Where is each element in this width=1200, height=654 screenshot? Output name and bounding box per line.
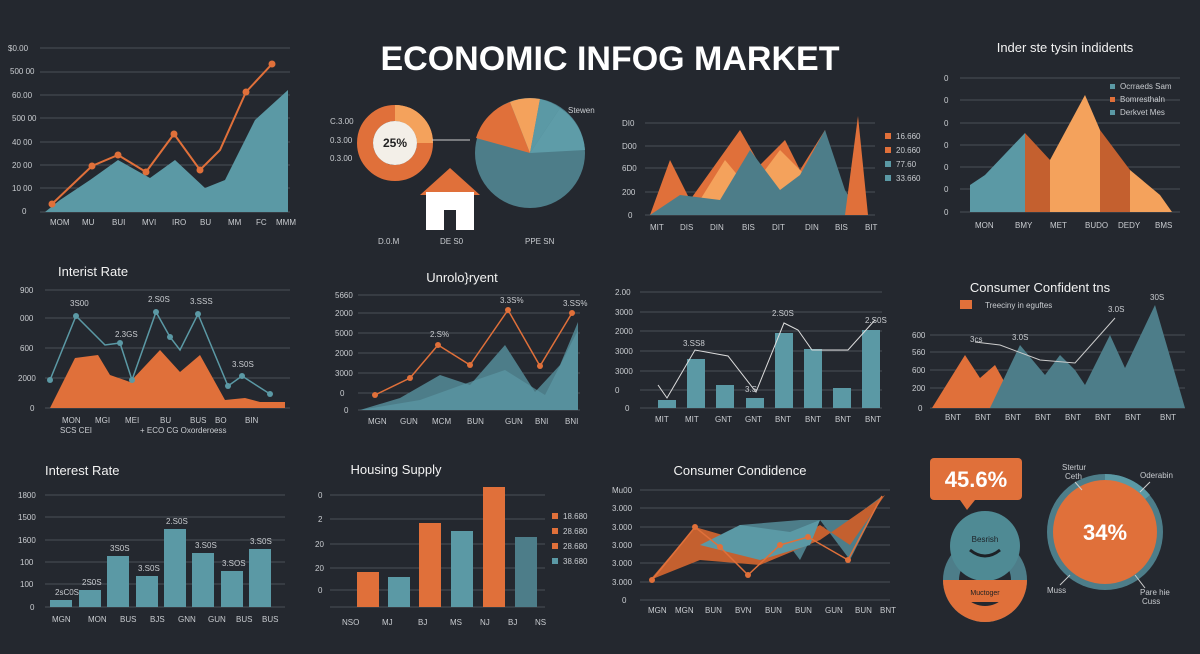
- panel: top right chart: BMS: [1155, 221, 1172, 230]
- panel: bar and line chart: GNT: [745, 415, 762, 424]
- panel: consumer confidence area chart: BNT: [975, 413, 991, 422]
- panel: interist rate line chart: 3.S0S: [232, 360, 254, 369]
- panel: top-left area line chart: MU: [82, 218, 95, 227]
- panel: housing supply bar chart: MJ: [382, 618, 393, 627]
- donut: 34%: Ceth: [1065, 472, 1082, 481]
- panel: interest rate bar chart: 1500: [18, 513, 36, 522]
- panel: housing supply bar chart: NJ: [480, 618, 490, 627]
- panel: housing supply bar chart: 0: [318, 586, 323, 595]
- panel: top right chart: 0: [944, 119, 949, 128]
- panel: top right chart: Derkvet Mes: [1120, 108, 1165, 117]
- panel: interest rate bar chart: 2.S0S: [166, 517, 188, 526]
- panel: top middle-right area chart: BIS: [835, 223, 848, 232]
- panel: interist rate line chart: MEI: [125, 416, 139, 425]
- panel: consumer condidence area chart: Consumer Condidence: [674, 463, 806, 478]
- panel: unemployment chart: 2.S%: [430, 330, 449, 339]
- panel: interist rate line chart: 900: [20, 286, 34, 295]
- donut chart: 0.3.00: [330, 136, 353, 145]
- icon: house: [378, 140, 555, 246]
- panel: interest rate bar chart: 3.SOS: [222, 559, 246, 568]
- panel: consumer condidence area chart: BUN: [855, 606, 872, 615]
- panel: top-left area line chart: BUI: [112, 218, 125, 227]
- panel: top middle-right area chart: DIN: [805, 223, 819, 232]
- panel: consumer confidence area chart: 600: [912, 366, 926, 375]
- panel: housing supply bar chart: 2: [318, 515, 323, 524]
- panel: bar and line chart: 3.S: [745, 385, 757, 394]
- panel: top right chart: Inder ste tysin indidents: [997, 40, 1134, 55]
- panel: consumer confidence area chart: BNT: [1005, 413, 1021, 422]
- panel: top right chart: 0: [944, 74, 949, 83]
- panel: consumer confidence area chart: BNT: [1035, 413, 1051, 422]
- panel: top-left area line chart: MMM: [276, 218, 296, 227]
- panel: housing supply bar chart: NS: [535, 618, 546, 627]
- panel: top middle-right area chart: DIS: [680, 223, 693, 232]
- panel: top-left area line chart: 500 00: [12, 114, 37, 123]
- panel: consumer condidence area chart: MGN: [648, 606, 667, 615]
- panel: interist rate line chart: 2000: [18, 374, 36, 383]
- panel: interist rate line chart: BU: [160, 416, 171, 425]
- panel: bar and line chart: 3.SS8: [683, 339, 705, 348]
- panel: top-left area line chart: MM: [228, 218, 242, 227]
- panel: consumer condidence area chart: 3.000: [612, 523, 633, 532]
- panel: interest rate bar chart: 2sC0S: [55, 588, 79, 597]
- panel: top middle-right area chart: 77.60: [896, 160, 917, 169]
- panel: unemployment chart: 5660: [335, 291, 353, 300]
- panel: consumer condidence area chart: BUN: [795, 606, 812, 615]
- panel: unemployment chart: BUN: [467, 417, 484, 426]
- panel: unemployment chart: 0: [340, 389, 345, 398]
- panel: bar and line chart: 2.S0S: [865, 316, 887, 325]
- panel: interest rate bar chart: 3.S0S: [138, 564, 160, 573]
- panel: top-left area line chart: MOM: [50, 218, 70, 227]
- panel: consumer condidence area chart: Mu00: [612, 486, 633, 495]
- panel: top-left area line chart: [8, 44, 296, 227]
- panel: housing supply bar chart: Housing Supply: [350, 462, 442, 477]
- panel: top middle-right area chart: 6D0: [622, 164, 637, 173]
- panel: unemployment chart: 0: [344, 406, 349, 415]
- panel: unemployment chart: GUN: [505, 417, 523, 426]
- donut chart: 25%: [383, 136, 407, 150]
- panel: top right chart: 0: [944, 185, 949, 194]
- panel: housing supply bar chart: 20: [315, 540, 324, 549]
- panel: interest rate bar chart: 2S0S: [82, 578, 102, 587]
- panel: interest rate bar chart: BUS: [262, 615, 278, 624]
- panel: interist rate line chart: 3.SSS: [190, 297, 213, 306]
- panel: consumer condidence area chart: BNT: [880, 606, 896, 615]
- panel: interest rate bar chart: 100: [20, 580, 34, 589]
- donut: 34%: Oderabin: [1140, 471, 1173, 480]
- panel: interist rate line chart: BO: [215, 416, 227, 425]
- panel: interest rate bar chart: 3S0S: [110, 544, 130, 553]
- panel: housing supply bar chart: BJ: [508, 618, 517, 627]
- panel: consumer confidence area chart: 600: [912, 331, 926, 340]
- panel: unemployment chart: 3000: [335, 369, 353, 378]
- panel: housing supply bar chart: BJ: [418, 618, 427, 627]
- panel: interist rate line chart: 2.S0S: [148, 295, 170, 304]
- panel: interest rate bar chart: 1800: [18, 491, 36, 500]
- panel: unemployment chart: MGN: [368, 417, 387, 426]
- panel: unemployment chart: Unrolo}ryent: [426, 270, 498, 285]
- panel: consumer confidence area chart: BNT: [1065, 413, 1081, 422]
- panel: interest rate bar chart: MGN: [52, 615, 71, 624]
- pie chart: [475, 98, 595, 208]
- panel: consumer condidence area chart: BUN: [705, 606, 722, 615]
- panel: top right chart: 0: [944, 163, 949, 172]
- panel: consumer condidence area chart: [612, 463, 896, 615]
- panel: interist rate line chart: Interist Rate: [58, 264, 128, 279]
- panel: top-left area line chart: FC: [256, 218, 267, 227]
- panel: interist rate line chart: 2.3GS: [115, 330, 138, 339]
- panel: housing supply bar chart: NSO: [342, 618, 359, 627]
- icon: house: DE S0: [440, 237, 464, 246]
- panel: unemployment chart: 3.3S%: [500, 296, 524, 305]
- panel: top-left area line chart: 0: [22, 207, 27, 216]
- panel: top right chart: MET: [1050, 221, 1067, 230]
- panel: consumer confidence area chart: BNT: [945, 413, 961, 422]
- panel: top middle-right area chart: 20.660: [896, 146, 921, 155]
- panel: unemployment chart: BNI: [535, 417, 548, 426]
- panel: consumer confidence area chart: Treeciny in eguftes: [985, 301, 1052, 310]
- panel: bar and line chart: MIT: [685, 415, 699, 424]
- panel: top-left area line chart: 500 00: [10, 67, 35, 76]
- panel: bar and line chart: 0: [625, 404, 630, 413]
- panel: consumer confidence area chart: 30S: [1150, 293, 1164, 302]
- icon: house: PPE SN: [525, 237, 555, 246]
- panel: top-left area line chart: BU: [200, 218, 211, 227]
- panel: consumer confidence area chart: 3.0S: [1012, 333, 1028, 342]
- panel: bar and line chart: BNT: [775, 415, 791, 424]
- panel: bar and line chart: BNT: [835, 415, 851, 424]
- panel: unemployment chart: 2000: [335, 309, 353, 318]
- panel: interest rate bar chart: GUN: [208, 615, 226, 624]
- icon: face gauge: Muctoger: [970, 590, 1000, 597]
- panel: top-left area line chart: $0.00: [8, 44, 29, 53]
- panel: top right chart: [944, 40, 1180, 230]
- donut: 34%: 34%: [1083, 520, 1127, 545]
- panel: top right chart: MON: [975, 221, 994, 230]
- panel: interest rate bar chart: 100: [20, 558, 34, 567]
- panel: consumer condidence area chart: MGN: [675, 606, 694, 615]
- panel: consumer confidence area chart: 0: [918, 404, 923, 413]
- panel: interest rate bar chart: GNN: [178, 615, 196, 624]
- panel: top right chart: BUDO: [1085, 221, 1108, 230]
- panel: unemployment chart: GUN: [400, 417, 418, 426]
- pie chart: Stewen: [568, 106, 595, 115]
- panel: top-left area line chart: 20 00: [12, 161, 33, 170]
- panel: top middle-right area chart: 16.660: [896, 132, 921, 141]
- panel: housing supply bar chart: [315, 462, 588, 627]
- panel: bar and line chart: MIT: [655, 415, 669, 424]
- panel: top-left area line chart: 10 00: [12, 184, 33, 193]
- donut: 34%: Muss: [1047, 586, 1066, 595]
- panel: interist rate line chart: 600: [20, 344, 34, 353]
- panel: top middle-right area chart: DI0: [622, 119, 635, 128]
- panel: bar and line chart: BNT: [865, 415, 881, 424]
- panel: bar and line chart: 0: [615, 386, 620, 395]
- panel: consumer condidence area chart: BVN: [735, 606, 752, 615]
- panel: consumer confidence area chart: 200: [912, 384, 926, 393]
- panel: unemployment chart: 5000: [335, 329, 353, 338]
- panel: top middle-right area chart: DIN: [710, 223, 724, 232]
- panel: bar and line chart: 2.S0S: [772, 309, 794, 318]
- panel: consumer confidence area chart: [912, 280, 1185, 422]
- panel: top right chart: 0: [944, 96, 949, 105]
- panel: interest rate bar chart: MON: [88, 615, 107, 624]
- donut: 34%: Stertur: [1062, 463, 1086, 472]
- donut chart: C.3.00: [330, 117, 354, 126]
- icon: face gauge: [943, 511, 1027, 622]
- panel: unemployment chart: 3.SS%: [563, 299, 587, 308]
- panel: top middle-right area chart: 200: [622, 188, 636, 197]
- panel: interist rate line chart: 000: [20, 314, 34, 323]
- panel: consumer confidence area chart: 3.0S: [1108, 305, 1124, 314]
- panel: interist rate line chart: BIN: [245, 416, 259, 425]
- panel: housing supply bar chart: 38.680: [563, 557, 588, 566]
- panel: top middle-right area chart: DIT: [772, 223, 785, 232]
- panel: top-left area line chart: MVI: [142, 218, 156, 227]
- panel: housing supply bar chart: 28.680: [563, 527, 588, 536]
- panel: consumer condidence area chart: 3.000: [612, 578, 633, 587]
- panel: interist rate line chart: 3S00: [70, 299, 89, 308]
- panel: interest rate bar chart: [18, 463, 285, 624]
- panel: consumer condidence area chart: 3.000: [612, 541, 633, 550]
- panel: consumer confidence area chart: BNT: [1160, 413, 1176, 422]
- panel: consumer condidence area chart: GUN: [825, 606, 843, 615]
- panel: unemployment chart: [335, 270, 587, 426]
- panel: bar and line chart: GNT: [715, 415, 732, 424]
- panel: interist rate line chart: 0: [30, 404, 35, 413]
- panel: bar and line chart: 2000: [615, 327, 633, 336]
- donut: 34%: [1047, 463, 1173, 606]
- panel: consumer confidence area chart: BNT: [1095, 413, 1111, 422]
- donut: 34%: Pare hie: [1140, 588, 1170, 597]
- callout: 45.6%: [930, 458, 1022, 510]
- panel: consumer confidence area chart: 560: [912, 348, 926, 357]
- panel: top middle-right area chart: 33.660: [896, 174, 921, 183]
- panel: bar and line chart: 3000: [615, 367, 633, 376]
- panel: interist rate line chart: + ECO CG Oxorderoess: [140, 426, 226, 435]
- panel: top-left area line chart: 60.00: [12, 91, 33, 100]
- panel: unemployment chart: MCM: [432, 417, 451, 426]
- panel: top right chart: Ocrraeds Sam: [1120, 82, 1172, 91]
- panel: top middle-right area chart: 0: [628, 211, 633, 220]
- panel: housing supply bar chart: 20: [315, 564, 324, 573]
- panel: interest rate bar chart: 1600: [18, 536, 36, 545]
- panel: top middle-right area chart: D00: [622, 142, 637, 151]
- panel: consumer condidence area chart: 3.000: [612, 504, 633, 513]
- panel: top right chart: BMY: [1015, 221, 1033, 230]
- panel: bar and line chart: [615, 288, 887, 424]
- panel: housing supply bar chart: 0: [318, 491, 323, 500]
- panel: consumer confidence area chart: BNT: [1125, 413, 1141, 422]
- panel: interest rate bar chart: 3.S0S: [195, 541, 217, 550]
- panel: top right chart: 0: [944, 208, 949, 217]
- panel: top right chart: DEDY: [1118, 221, 1141, 230]
- panel: interest rate bar chart: Interest Rate: [45, 463, 119, 478]
- panel: housing supply bar chart: 28.680: [563, 542, 588, 551]
- callout: 45.6%: 45.6%: [945, 467, 1007, 492]
- panel: unemployment chart: 2000: [335, 349, 353, 358]
- panel: interest rate bar chart: 0: [30, 603, 35, 612]
- panel: bar and line chart: BNT: [805, 415, 821, 424]
- panel: interest rate bar chart: BUS: [120, 615, 136, 624]
- donut chart: [330, 113, 425, 173]
- panel: housing supply bar chart: 18.680: [563, 512, 588, 521]
- panel: interest rate bar chart: BJS: [150, 615, 165, 624]
- panel: consumer condidence area chart: 0: [622, 596, 627, 605]
- panel: top middle-right area chart: [622, 116, 921, 232]
- panel: interist rate line chart: BUS: [190, 416, 206, 425]
- panel: bar and line chart: 2.00: [615, 288, 631, 297]
- panel: consumer condidence area chart: 3.000: [612, 559, 633, 568]
- panel: consumer confidence area chart: 3cs: [970, 335, 982, 344]
- title: ECONOMIC INFOG MARKET: [381, 40, 840, 78]
- panel: interist rate line chart: MGI: [95, 416, 110, 425]
- panel: interist rate line chart: SCS CEI: [60, 426, 92, 435]
- panel: bar and line chart: 3000: [615, 308, 633, 317]
- panel: housing supply bar chart: MS: [450, 618, 462, 627]
- icon: house: D.0.M: [378, 237, 400, 246]
- panel: consumer condidence area chart: BUN: [765, 606, 782, 615]
- panel: interest rate bar chart: BUS: [236, 615, 252, 624]
- panel: top middle-right area chart: MIT: [650, 223, 664, 232]
- panel: bar and line chart: 3000: [615, 347, 633, 356]
- panel: interist rate line chart: MON: [62, 416, 81, 425]
- donut: 34%: Cuss: [1142, 597, 1160, 606]
- panel: interest rate bar chart: 3.S0S: [250, 537, 272, 546]
- panel: unemployment chart: BNI: [565, 417, 578, 426]
- icon: face gauge: Besrish: [972, 535, 998, 544]
- panel: top right chart: Bomresthaln: [1120, 95, 1165, 104]
- panel: top middle-right area chart: BIT: [865, 223, 878, 232]
- panel: top-left area line chart: 40 00: [12, 138, 33, 147]
- panel: interist rate line chart: [18, 264, 290, 435]
- panel: top right chart: 0: [944, 141, 949, 150]
- panel: top middle-right area chart: BIS: [742, 223, 755, 232]
- panel: consumer confidence area chart: Consumer Confident tns: [970, 280, 1111, 295]
- donut chart: 0.3.00: [330, 154, 353, 163]
- panel: top-left area line chart: IRO: [172, 218, 186, 227]
